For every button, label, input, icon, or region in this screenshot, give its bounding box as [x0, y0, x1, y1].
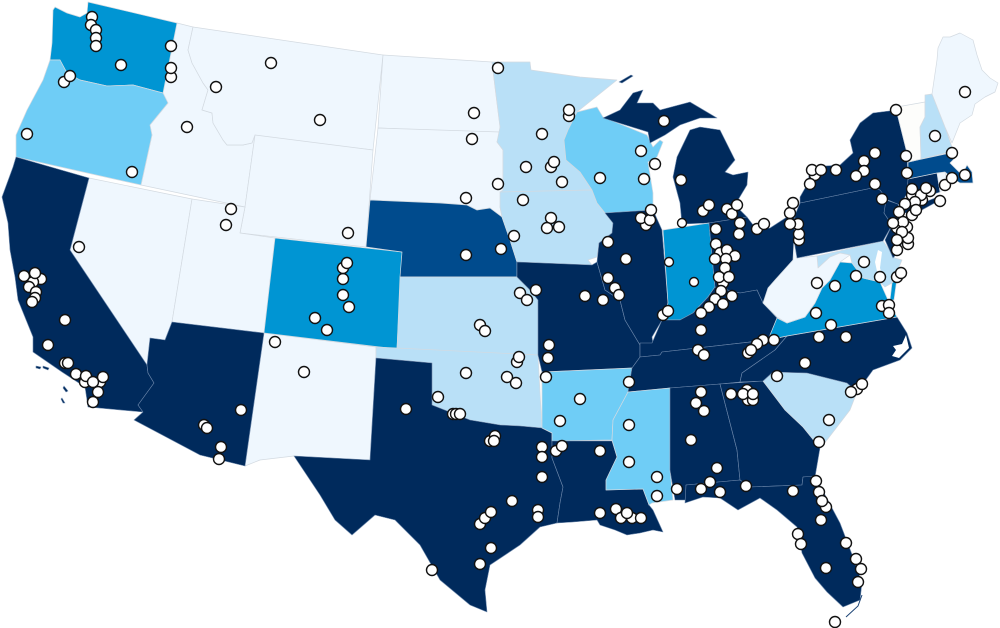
state: Louisiana	[552, 441, 663, 535]
state: South Dakota	[370, 128, 503, 217]
state: New Jersey	[884, 200, 905, 258]
state: Michigan lower peninsula	[673, 127, 748, 224]
state: Oklahoma	[376, 347, 542, 428]
california southern island two	[61, 398, 65, 403]
eastern shore of Virginia	[890, 278, 897, 300]
state: New York	[800, 110, 908, 205]
state: Maryland and Delaware	[817, 241, 902, 287]
state: Utah	[172, 199, 275, 333]
state: New Mexico	[245, 333, 376, 466]
state: Arkansas	[542, 368, 632, 441]
florida keys	[846, 595, 862, 617]
state: Idaho	[141, 23, 255, 207]
state: New Hampshire	[920, 94, 952, 159]
state: Colorado	[264, 238, 402, 349]
california channel islands east	[43, 366, 49, 370]
state: North Carolina	[740, 317, 912, 392]
california channel islands	[36, 366, 41, 369]
state: Iowa	[500, 190, 613, 265]
state: Florida	[685, 476, 862, 607]
state: Nevada	[70, 178, 192, 365]
state: Georgia	[720, 381, 820, 487]
state: Oregon	[16, 60, 168, 185]
state: Kentucky	[640, 287, 777, 357]
state: Virginia	[768, 262, 897, 340]
state: California	[2, 157, 154, 412]
state: Wyoming	[240, 135, 373, 247]
long island	[903, 196, 942, 213]
state: Vermont	[897, 102, 925, 162]
state: Illinois	[597, 210, 668, 345]
state: North Dakota	[378, 55, 502, 133]
state: Alabama	[670, 384, 740, 500]
chesapeake bay	[875, 250, 884, 280]
state: Kansas	[397, 277, 538, 355]
state: Ohio	[709, 208, 797, 303]
state: West Virginia	[763, 240, 850, 323]
state: Texas	[294, 358, 563, 612]
state: Missouri	[517, 262, 640, 372]
state: Mississippi	[606, 388, 673, 505]
state: Indiana	[663, 223, 715, 320]
state: Nebraska	[366, 200, 517, 277]
state: Arizona	[134, 322, 264, 466]
state: Wisconsin	[564, 107, 663, 213]
state: Rhode Island	[937, 172, 948, 192]
state: Washington	[50, 2, 177, 93]
state: Maine	[932, 33, 998, 143]
state: Minnesota	[492, 62, 617, 192]
state: Pennsylvania	[794, 188, 892, 258]
state: Montana	[188, 27, 383, 150]
pamlico sound	[892, 335, 909, 358]
state: South Carolina	[763, 372, 857, 448]
state: Massachusetts	[908, 153, 973, 183]
state: Connecticut	[906, 173, 940, 205]
california southern island	[63, 386, 68, 392]
isle royale	[619, 75, 633, 83]
state: Tennessee	[628, 336, 787, 392]
state: Michigan upper peninsula	[603, 90, 717, 143]
